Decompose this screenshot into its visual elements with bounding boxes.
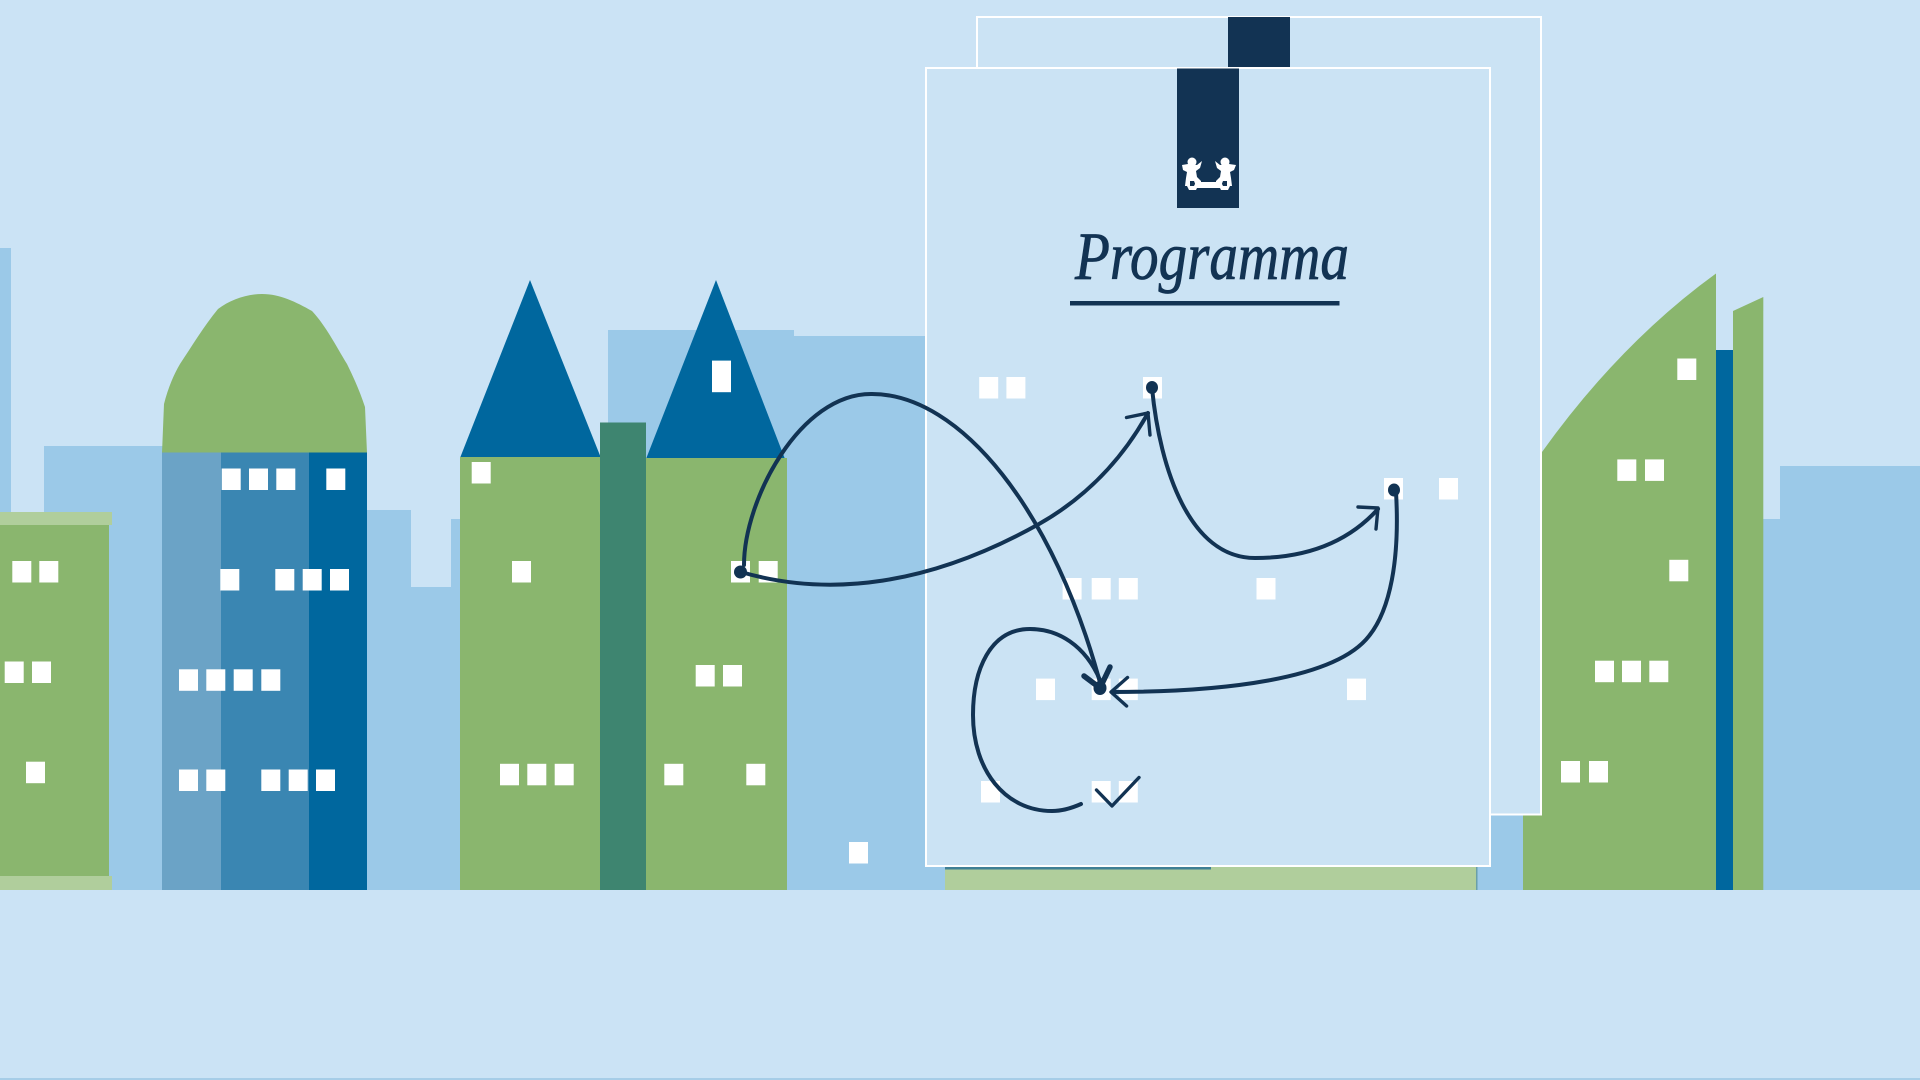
- motto banner: [1187, 182, 1230, 190]
- ground: [0, 890, 1920, 1080]
- arrow: loop from centre to check mark: [973, 629, 1100, 811]
- building: domed tower: [162, 294, 367, 890]
- background skyline: pale blue buildings: [0, 248, 1920, 890]
- ribbon with logo: [1177, 68, 1239, 208]
- document: back page: [977, 17, 1541, 814]
- building: left pointed tower: [460, 280, 601, 890]
- arrow: loop from left window to centre: [744, 394, 1102, 690]
- arrow: right window to centre: [1111, 492, 1397, 706]
- arrow: from left window to top window: [741, 413, 1150, 585]
- low light green building behind document: [945, 866, 1478, 890]
- window on pale building: [849, 842, 868, 864]
- title underline: [1070, 301, 1340, 306]
- building: right pointed tower: [646, 280, 787, 890]
- building: right sail-shaped tower: [1523, 274, 1763, 890]
- windows on document: [979, 377, 1458, 802]
- arrowhead: centre target: [1084, 667, 1110, 688]
- left lion: [1182, 158, 1202, 186]
- title: Programma: [1074, 218, 1349, 294]
- building: teal connecting column: [600, 422, 646, 890]
- document: front page: [926, 68, 1490, 866]
- icon: coat of arms with two lions: [1182, 158, 1236, 190]
- route dots: [734, 381, 1400, 695]
- right lion: [1215, 158, 1236, 186]
- icon: check mark: [1096, 778, 1139, 806]
- route arrows: [741, 388, 1397, 811]
- building: left green block: [0, 512, 112, 890]
- arrow: top window to right window: [1152, 388, 1378, 558]
